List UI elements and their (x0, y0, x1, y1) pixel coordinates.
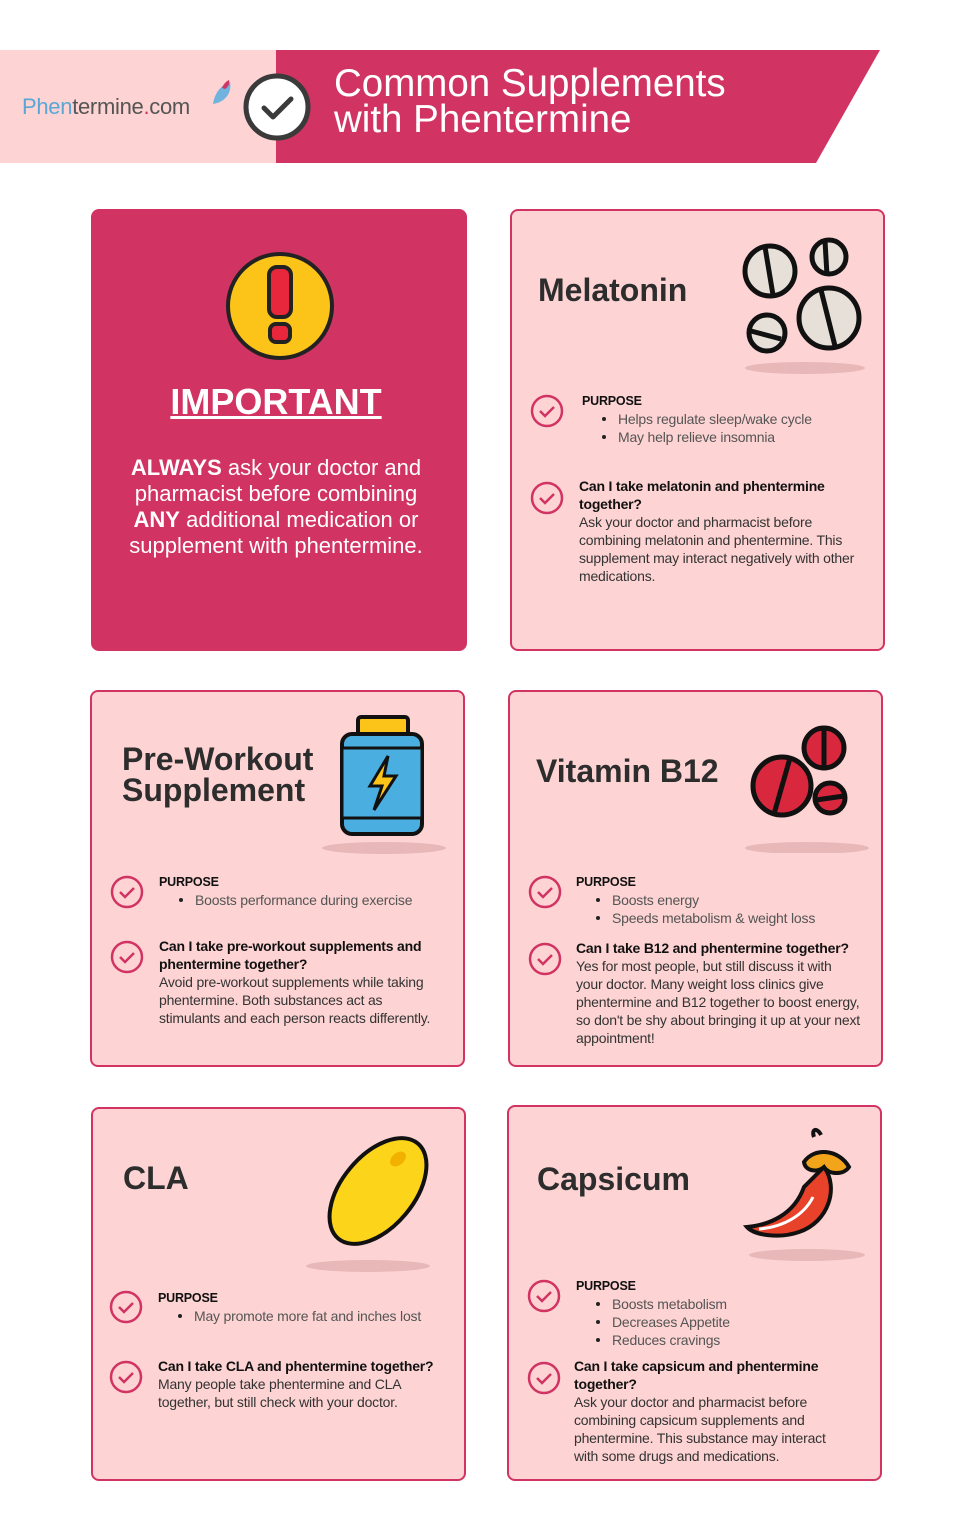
purpose text: Boosts energy (612, 892, 699, 908)
question text: Can I take B12 and phentermine together? (576, 940, 849, 956)
question check icon (528, 942, 562, 976)
title: vitamin b12: Vitamin B12 (536, 753, 719, 789)
title: pre-workout: Pre-Workout (122, 741, 313, 777)
purpose text: Boosts performance during exercise (195, 892, 412, 908)
purpose text: PURPOSE (576, 1279, 636, 1293)
header title: Common Supplements (334, 62, 726, 105)
icon: red pills (745, 726, 869, 853)
title: pre-workout (122, 741, 313, 808)
panel: cla (91, 1107, 466, 1481)
purpose text: PURPOSE (159, 875, 219, 889)
icon: chili pepper (743, 1128, 865, 1261)
purpose check icon (110, 876, 144, 908)
purpose text: Decreases Appetite (612, 1314, 730, 1330)
purpose text (576, 1279, 730, 1348)
purpose text (158, 1291, 422, 1324)
question text (158, 1358, 433, 1410)
heading: important: IMPORTANT (170, 381, 382, 422)
purpose text: May promote more fat and inches lost (194, 1308, 421, 1324)
icon: logo leaf (213, 80, 230, 104)
purpose text (159, 875, 412, 908)
question check icon (530, 482, 564, 514)
question text (159, 938, 430, 1026)
title: pre-workout: Supplement (122, 772, 305, 808)
purpose check icon (528, 876, 562, 908)
question text: Yes for most people, but still discuss it with your doctor. Many weight loss clinics give phentermine and B12 together to boost energy, so don't be shy about bringing it up at your next appointment! (576, 958, 860, 1046)
purpose text: Boosts metabolism (612, 1296, 727, 1312)
icon: supplement jar (322, 715, 446, 854)
header title: with Phentermine (334, 98, 631, 141)
panel: capsicum (507, 1105, 882, 1481)
panel: vitamin b12 (508, 690, 883, 1067)
header left pink band (0, 50, 280, 163)
purpose text: PURPOSE (158, 1291, 218, 1305)
header banner (0, 50, 880, 163)
question check icon (110, 1360, 142, 1394)
purpose text (582, 394, 812, 445)
icon: exclamation (226, 252, 334, 360)
title: capsicum: Capsicum (537, 1161, 690, 1197)
header magenta band (276, 50, 880, 163)
icon: header check circle (244, 74, 310, 140)
purpose text: Speeds metabolism & weight loss (612, 910, 815, 926)
icon: pills (742, 238, 865, 374)
question text: Can I take melatonin and phentermine together? (579, 478, 825, 512)
purpose text: May help relieve insomnia (618, 429, 775, 445)
purpose check icon (530, 394, 564, 428)
question text: Ask your doctor and pharmacist before combining melatonin and phentermine. This supplement may interact negatively with other medications. (579, 514, 854, 584)
purpose check icon (110, 1290, 142, 1324)
important text: ALWAYS ask your doctor and pharmacist before combining ANY additional medication or supplement with phentermine. (129, 455, 423, 558)
purpose text: PURPOSE (576, 875, 636, 889)
icon: softgel (306, 1136, 430, 1272)
title: cla: CLA (123, 1160, 189, 1196)
purpose check icon (528, 1280, 560, 1312)
question text: Many people take phentermine and CLA together, but still check with your doctor. (158, 1376, 401, 1410)
panel: pre-workout (90, 690, 465, 1067)
logo: Phentermine.com (22, 94, 190, 119)
title: melatonin: Melatonin (538, 272, 687, 308)
question text: Can I take capsicum and phentermine together? (574, 1358, 818, 1392)
header title (334, 62, 726, 141)
panel: melatonin (510, 209, 885, 651)
question check icon (110, 940, 144, 974)
question text: Can I take pre-workout supplements and phentermine together? (159, 938, 421, 972)
question text (579, 478, 854, 584)
question text: Ask your doctor and pharmacist before combining capsicum supplements and phentermine. This substance may interact with some drugs and medications. (574, 1394, 826, 1464)
question text: Avoid pre-workout supplements while taking phentermine. Both substances act as stimulants and each person reacts differently. (159, 974, 430, 1026)
panel: important (91, 209, 467, 651)
purpose text: Reduces cravings (612, 1332, 720, 1348)
purpose text (576, 875, 815, 926)
question check icon (528, 1362, 560, 1394)
question text: Can I take CLA and phentermine together? (158, 1358, 433, 1374)
purpose text: Helps regulate sleep/wake cycle (618, 411, 812, 427)
question text (574, 1358, 826, 1464)
purpose text: PURPOSE (582, 394, 642, 408)
